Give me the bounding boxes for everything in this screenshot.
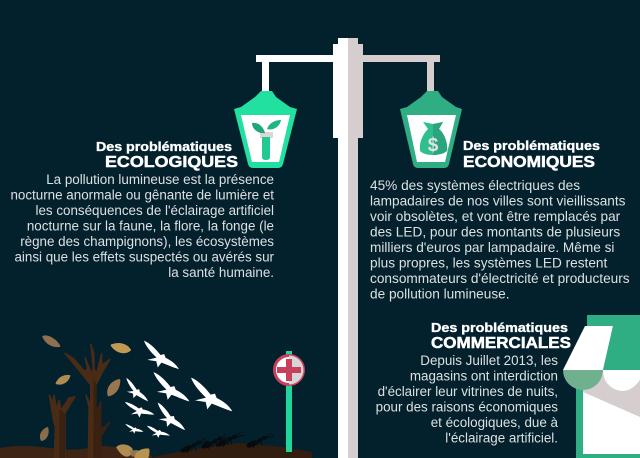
text block: ecological: la santé humaine. — [168, 265, 274, 280]
ants — [179, 432, 274, 454]
text block: economic: voir obsolètes, et vont être remplacés par — [370, 209, 621, 224]
leaves — [41, 336, 149, 458]
text block: ecological: les conséquences de l'éclairage artificiel — [35, 203, 274, 218]
text block: economic: des LED, pour des montants de plusieurs — [370, 224, 620, 240]
text block: ecological — [10, 172, 275, 280]
birds — [124, 341, 232, 441]
text block: ecological: nocturne sur la faune, la flore, la fonge (le — [27, 218, 274, 234]
icon: shop front — [563, 315, 640, 458]
text block: commercial: d'éclairer leur vitrines de nuits, — [378, 384, 558, 399]
text block: ecological: nocturne anormale ou gênante de lumière et — [10, 188, 274, 202]
heading: economic — [463, 139, 600, 171]
text block: commercial — [376, 353, 559, 446]
heading: commercial: Des problématiques — [431, 321, 568, 335]
icon: right lantern with money bag: $ — [428, 135, 439, 156]
ground — [0, 443, 312, 458]
icon: left lantern with plant — [234, 91, 297, 168]
heading: economic: ECONOMIQUES — [463, 154, 595, 171]
text block: commercial: Depuis Juillet 2013, les — [420, 353, 558, 368]
icon: right lantern with money bag — [400, 91, 462, 168]
text block: ecological: La pollution lumineuse est la présence — [46, 172, 274, 187]
heading: economic: Des problématiques — [463, 139, 600, 153]
heading: ecological: ECOLOGIQUES — [105, 154, 238, 171]
text block: commercial: l'éclairage artificiel. — [445, 430, 558, 446]
text block: economic: plus propres, les systèmes LED restent — [370, 256, 608, 270]
text block: commercial: pour des raisons économiques — [376, 400, 558, 414]
text block: economic: milliers d'euros par lampadaire. Même si — [370, 240, 614, 255]
heading: commercial — [431, 321, 571, 352]
text block: ecological: règne des champignons), les écosystèmes — [20, 234, 274, 249]
text block: ecological: ainsi que les effets suspectés ou avérés sur — [14, 250, 275, 264]
text block: economic: 45% des systèmes électriques des — [370, 178, 580, 193]
trees — [49, 344, 110, 458]
heading: commercial: COMMERCIALES — [431, 335, 571, 352]
icon: medical cross sign — [274, 351, 304, 452]
heading: ecological: Des problématiques — [96, 140, 232, 154]
text block: economic: lampadaires de nos villes sont vieillissants — [370, 194, 626, 208]
text block: commercial: et écologiques, due à — [431, 415, 559, 430]
text block: economic: de pollution lumineuse. — [370, 286, 510, 302]
heading: ecological — [96, 140, 238, 171]
street lamp pole — [256, 38, 440, 458]
text block: economic — [370, 178, 630, 302]
text block: economic: consommateurs d'électricité et producteurs — [370, 271, 630, 286]
text block: commercial: magasins ont interdiction — [410, 368, 558, 384]
